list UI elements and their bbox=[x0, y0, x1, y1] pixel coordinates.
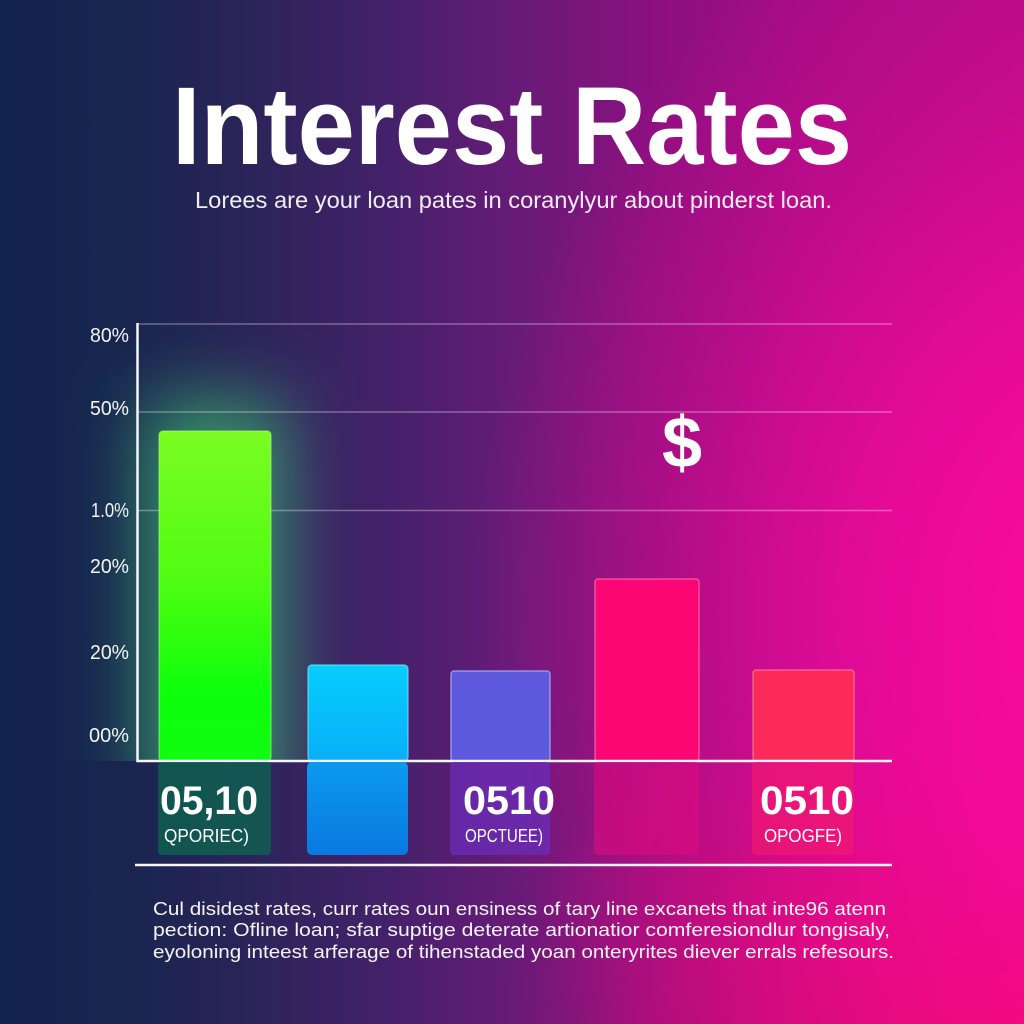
title: Interest Rates bbox=[172, 65, 852, 188]
card: green: 05,10 bbox=[160, 779, 258, 823]
card: indigo: 0510 bbox=[463, 779, 555, 823]
axes bbox=[138, 323, 892, 761]
card: indigo bbox=[450, 762, 555, 855]
value cards row bbox=[158, 762, 854, 855]
card: red: 0510 bbox=[760, 779, 854, 823]
card: red: OPOGFE) bbox=[764, 826, 842, 846]
bar chart bbox=[90, 323, 892, 762]
bar: magenta bbox=[595, 579, 699, 761]
card: blue bbox=[307, 762, 408, 855]
card: green bbox=[158, 762, 271, 855]
y-axis labels: 50% bbox=[90, 398, 129, 420]
bar: green bbox=[159, 431, 271, 761]
card: magenta bbox=[594, 762, 699, 855]
body paragraph: Cul disidest rates, curr rates oun ensiness of tary line excanets that inte96 atenn bbox=[153, 899, 886, 919]
body paragraph: pection: Ofline loan; sfar suptige deterate artionatior comferesiondlur tongisaly, bbox=[153, 920, 890, 940]
y-axis labels: 1.0% bbox=[91, 500, 129, 522]
dollar icon: $ bbox=[662, 403, 702, 483]
subtitle: Lorees are your loan pates in coranylyur about pinderst loan. bbox=[195, 187, 832, 213]
bar: red bbox=[753, 670, 854, 761]
y-axis gridlines bbox=[138, 324, 892, 510]
y-axis labels: 20% bbox=[90, 556, 129, 578]
green bar glow bbox=[145, 400, 285, 820]
y-axis labels: 20% bbox=[90, 642, 129, 664]
card: red bbox=[752, 762, 854, 855]
y-axis labels bbox=[89, 325, 129, 747]
y-axis labels: 80% bbox=[90, 325, 129, 347]
y-axis labels: 00% bbox=[89, 725, 129, 747]
card: green: QPORIEC) bbox=[164, 826, 249, 846]
card: indigo: OPCTUEE) bbox=[465, 826, 543, 846]
bar: indigo bbox=[451, 671, 550, 761]
divider line bbox=[135, 864, 892, 866]
body paragraph bbox=[153, 899, 894, 962]
bar: blue bbox=[308, 665, 408, 761]
body paragraph: eyoloning inteest arferage of tihenstaded yoan onteryrites diever errals refesours. bbox=[153, 942, 894, 962]
